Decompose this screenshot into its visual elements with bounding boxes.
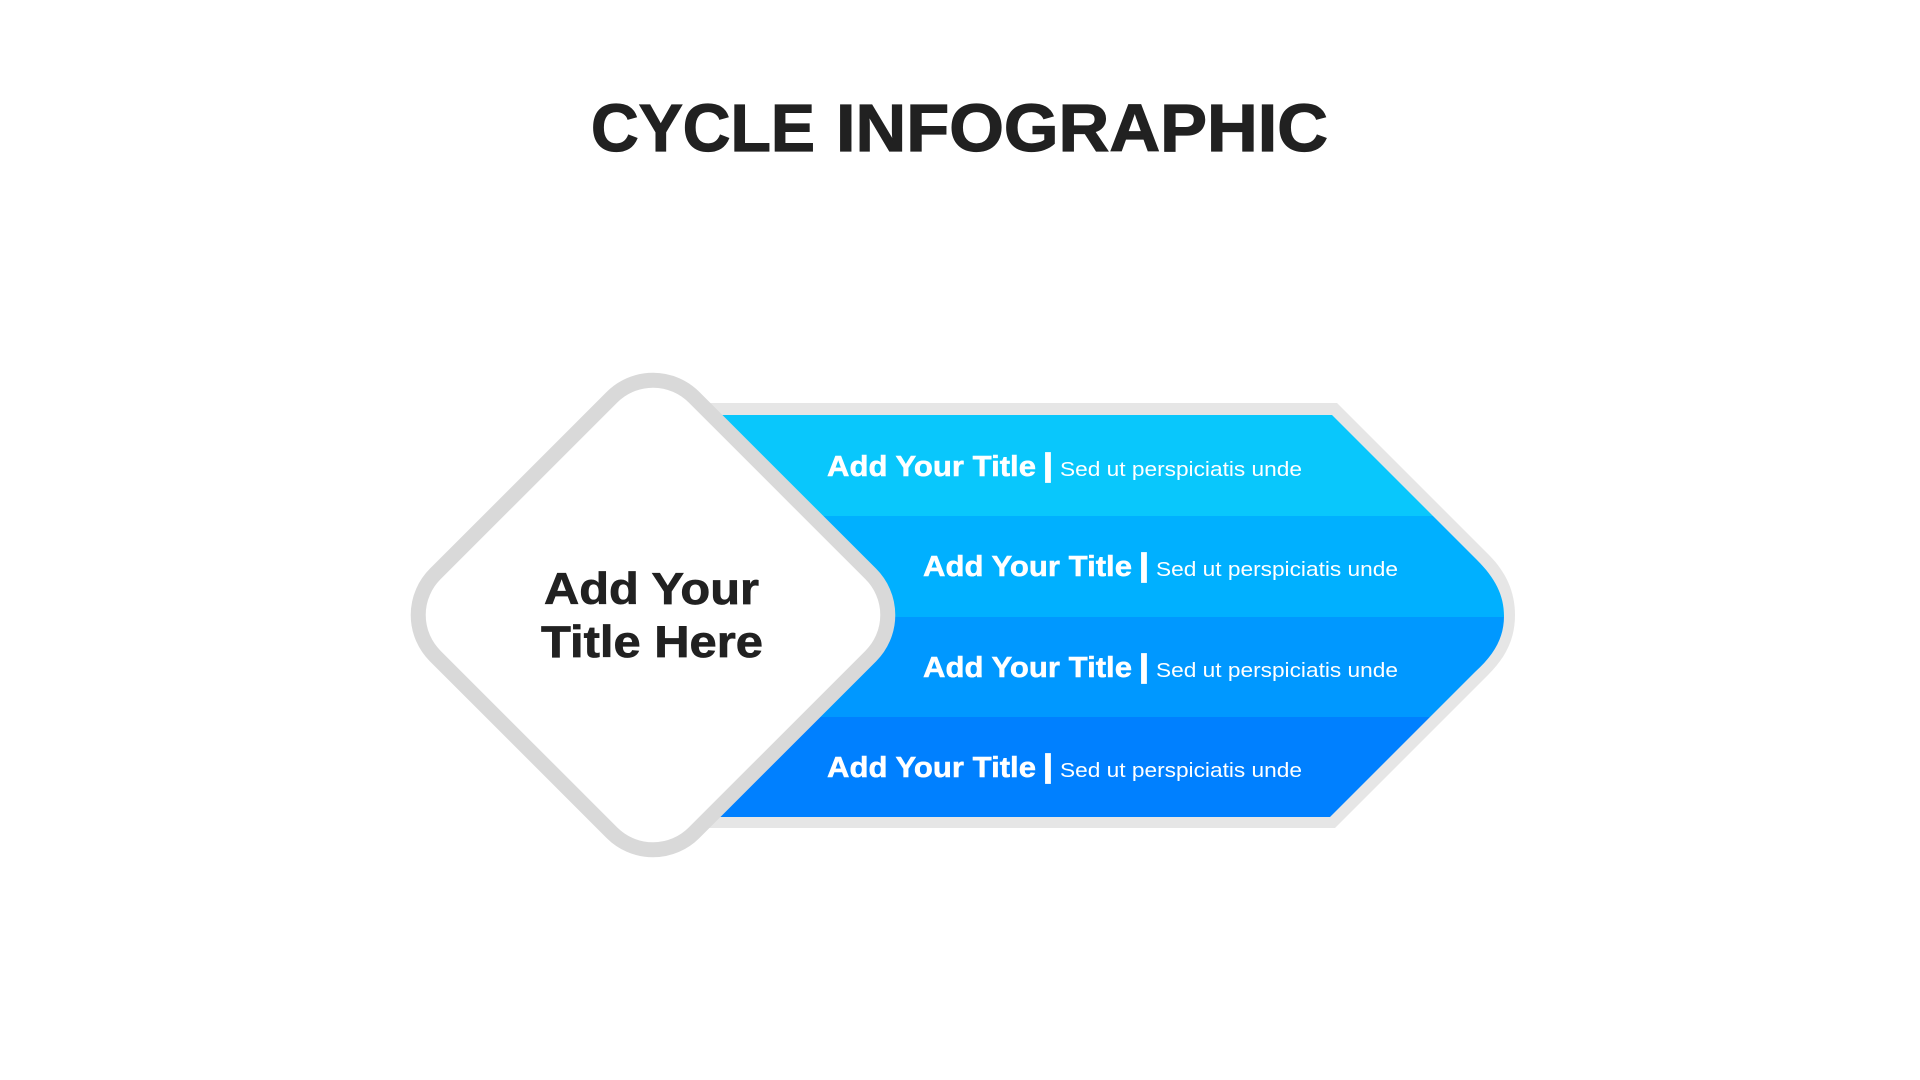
row 4 label: Sed ut perspiciatis unde (1060, 759, 1302, 782)
row 3 (820, 617, 1504, 717)
row 2 label (923, 547, 1398, 583)
row 2 (824, 516, 1504, 617)
row 1 (722, 415, 1433, 516)
row 1 label: | (1044, 447, 1052, 482)
row 3 label: Add Your Title (923, 652, 1132, 684)
row 3 label: | (1140, 648, 1148, 683)
row 2 label: Sed ut perspiciatis unde (1156, 558, 1398, 581)
row 1 label (827, 447, 1302, 483)
arrow outline (680, 403, 1515, 828)
row 2 label: Add Your Title (923, 551, 1132, 583)
row 3 label: Sed ut perspiciatis unde (1156, 659, 1398, 682)
title (591, 91, 1328, 166)
row 1 label: Sed ut perspiciatis unde (1060, 458, 1302, 481)
row 1 label: Add Your Title (827, 451, 1036, 483)
infographic canvas (410, 103, 1515, 858)
center title (541, 565, 763, 667)
center diamond (394, 356, 912, 874)
row 4 label (827, 748, 1302, 784)
title: INFOGRAPHIC (836, 91, 1328, 166)
row 3 label (923, 648, 1398, 684)
row 4 (720, 717, 1430, 817)
center title: Title Here (541, 618, 763, 667)
center title: Add Your (544, 565, 759, 614)
row 4 label: | (1044, 748, 1052, 783)
title: CYCLE (591, 91, 815, 166)
row 4 label: Add Your Title (827, 752, 1036, 784)
row 2 label: | (1140, 547, 1148, 582)
